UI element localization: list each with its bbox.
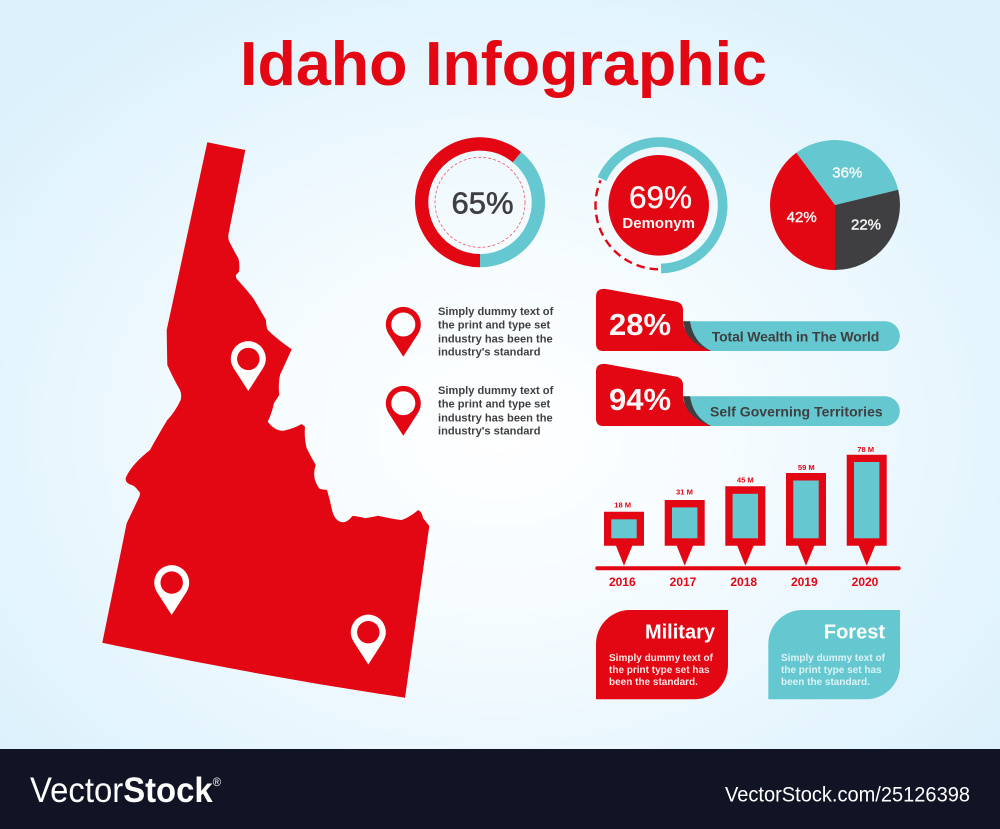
bar 2017: 31 M [676, 488, 693, 496]
bar 2016 [604, 501, 644, 589]
bar 2019 [786, 463, 826, 589]
logo: VectorStock: ® [213, 775, 221, 789]
title: Idaho Infographic [240, 30, 767, 99]
donut chart 65%: 65% [451, 186, 514, 220]
logo: VectorStock: VectorStock [30, 771, 219, 810]
donut chart 69% Demonym [596, 142, 723, 269]
bar 2016: 2016 [609, 575, 636, 589]
pie chart: 42% [787, 209, 817, 226]
pie chart: 22% [851, 216, 881, 234]
card: Military: the print type set has [609, 665, 710, 676]
card: Forest: been the standard. [781, 677, 870, 688]
bar 2019: 2019 [791, 575, 818, 589]
banner: 94% Self Governing [596, 364, 900, 426]
bar 2018 [725, 476, 765, 589]
map pin 2 [154, 565, 189, 615]
banner: 94% Self Governing: Self Governing Territories [710, 404, 883, 420]
timeline axis [595, 566, 901, 570]
card: Military [596, 610, 728, 699]
text block: Simply dummy text of [438, 385, 554, 397]
bar 2017: 2017 [670, 575, 697, 589]
text block: the print and type set [438, 320, 550, 332]
icon: location pin [386, 307, 421, 357]
image id: VectorStock.com/25126398 [725, 784, 970, 807]
text block: industry has been the [438, 333, 553, 345]
map: Idaho [102, 142, 429, 698]
bar 2020 [847, 445, 887, 589]
bar 2016: 18 M [614, 501, 631, 510]
card: Military: Military [645, 621, 716, 643]
card: Forest [768, 610, 900, 699]
donut chart 69% Demonym: 69% [629, 179, 692, 215]
pie chart [770, 140, 900, 270]
card: Military: Simply dummy text of [609, 653, 714, 664]
text block: industry's standard [438, 426, 541, 438]
banner: 28% Total Wealth: Total Wealth in The World [712, 329, 879, 345]
card: Military: been the standard. [609, 677, 698, 688]
icon: location pin [386, 386, 421, 436]
bar 2020: 78 M [857, 445, 874, 454]
text block: industry has been the [438, 412, 553, 424]
donut chart 65% [422, 144, 538, 261]
text block: Simply dummy text of [438, 306, 554, 318]
card: Forest: the print type set has [781, 665, 882, 676]
bar chart [595, 445, 901, 589]
banner: 94% Self Governing: 94% [609, 382, 671, 417]
map pin 1 [231, 341, 266, 391]
text block: the print and type set [438, 399, 550, 411]
bar 2019: 59 M [798, 463, 815, 472]
list item 2 [386, 385, 556, 438]
bar 2018: 2018 [730, 575, 757, 589]
bar 2017 [665, 488, 705, 589]
map pin 3 [351, 615, 386, 664]
banner: 28% Total Wealth [596, 289, 900, 351]
text block: industry's standard [438, 347, 541, 359]
list item 1 [386, 306, 556, 359]
banner: 28% Total Wealth: 28% [609, 307, 671, 342]
bar 2018: 45 M [737, 476, 754, 485]
pie chart: 36% [832, 164, 862, 182]
card: Forest: Forest [824, 621, 885, 643]
donut chart 69% Demonym: Demonym [622, 215, 695, 232]
footer bar [0, 749, 1000, 829]
card: Forest: Simply dummy text of [781, 653, 886, 664]
bar 2020: 2020 [852, 575, 879, 589]
